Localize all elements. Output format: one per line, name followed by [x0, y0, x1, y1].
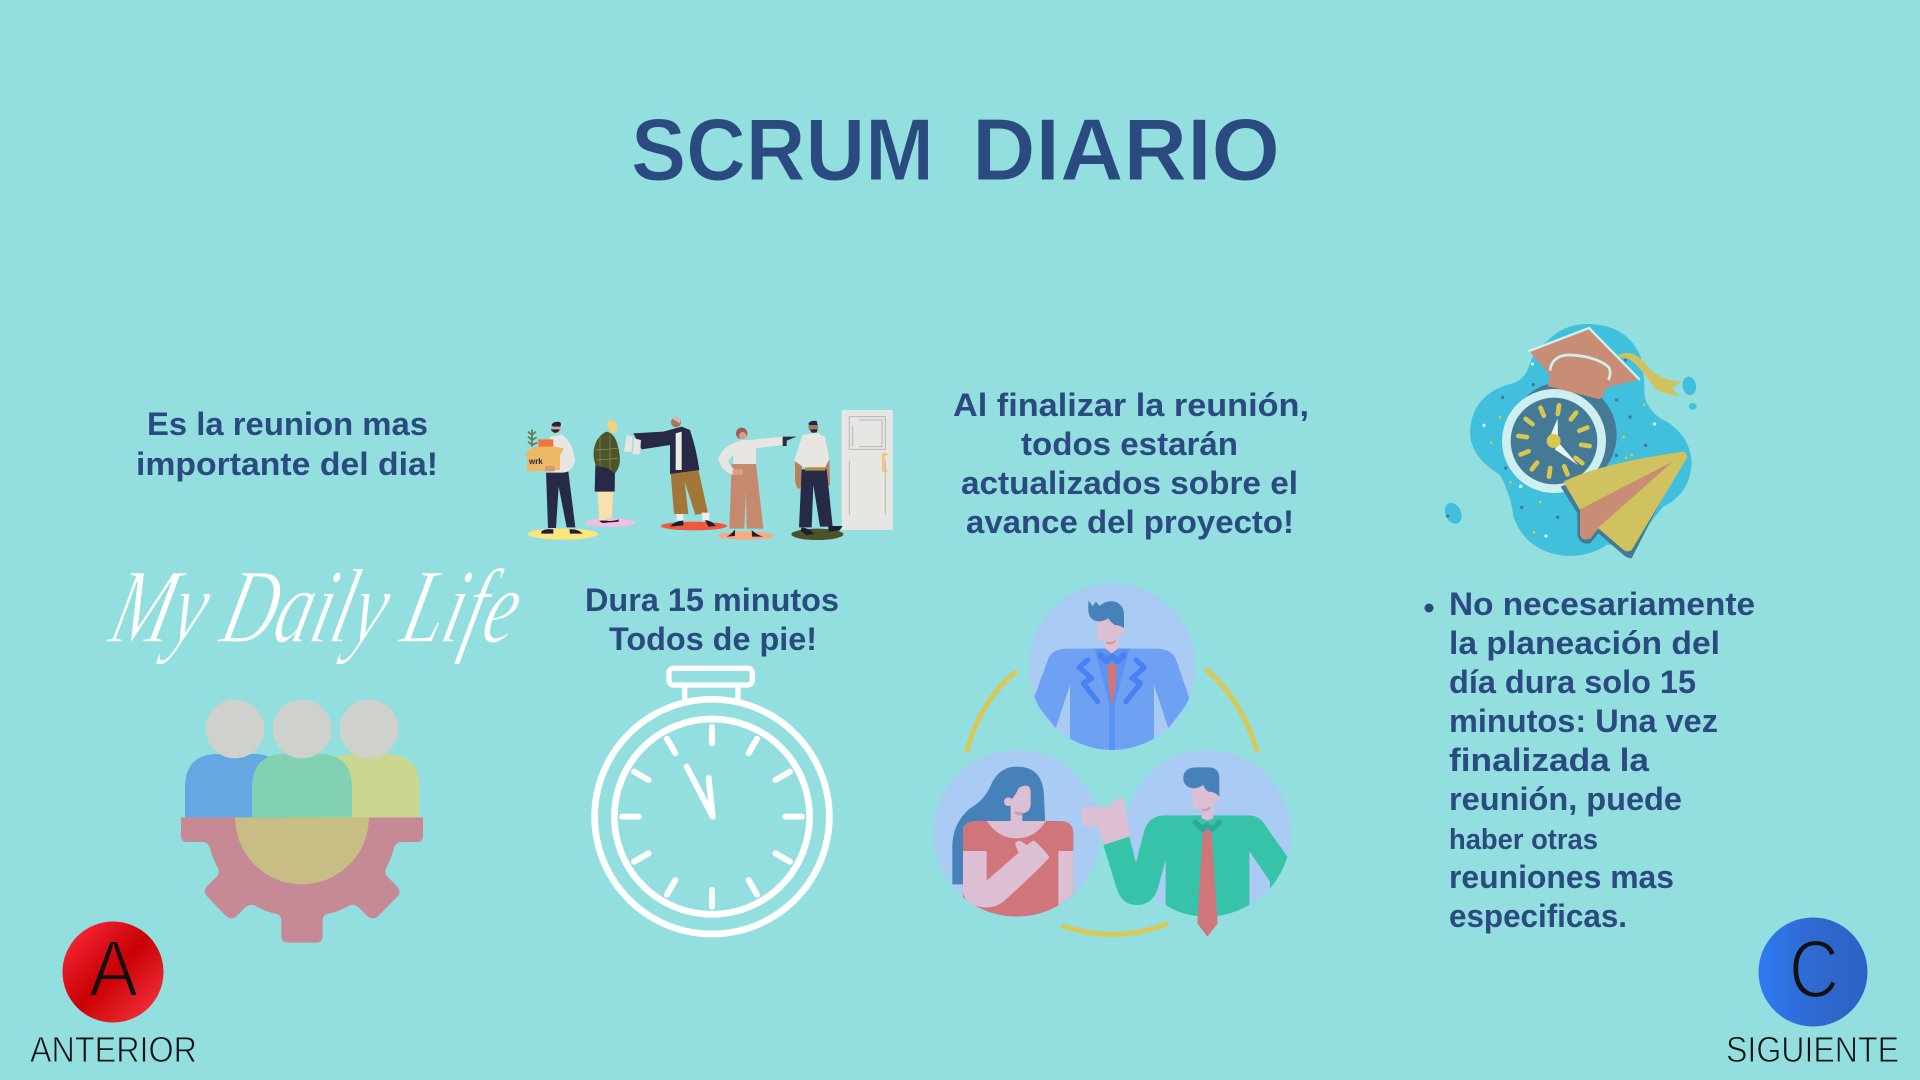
text block: at the end everyone is updated: actualizados sobre el [961, 465, 1298, 501]
woman in green sweater [594, 421, 620, 523]
circle: man in green shirt [1082, 750, 1291, 937]
button: anterior [30, 922, 197, 1070]
door [842, 410, 893, 530]
text block: at the end everyone is updated [953, 387, 1309, 540]
text block: lasts 15 minutes: Todos de pie! [609, 621, 817, 657]
title: DIARIO [972, 100, 1280, 199]
bullet lines: reuniones mas [1449, 859, 1674, 895]
icon: stopwatch [595, 668, 829, 934]
blob background [1470, 324, 1692, 556]
text block: most important meeting: Es la reunion mas [147, 406, 428, 442]
red circle [62, 922, 164, 1022]
letter A: A [89, 924, 139, 1013]
label anterior: ANTERIOR [30, 1029, 197, 1070]
bullet lines: la planeación del [1449, 625, 1720, 661]
button: siguiente [1726, 918, 1899, 1070]
person with box [525, 422, 583, 534]
label siguiente: SIGUIENTE [1726, 1029, 1899, 1070]
paint drops [1442, 376, 1698, 527]
alarm clock [1502, 382, 1617, 493]
circle: man in blue suit [1029, 583, 1195, 750]
person heads [206, 700, 398, 758]
bullet lines: finalizada la [1449, 742, 1649, 778]
text block: most important meeting [136, 406, 438, 482]
bullet lines: haber otras [1449, 824, 1598, 856]
person bodies [185, 754, 419, 817]
person with box: wrk [528, 457, 543, 466]
gear [181, 817, 423, 943]
text block: most important meeting: importante del dia! [136, 446, 438, 482]
text block: lasts 15 minutes [585, 582, 839, 657]
circle: woman in red shirt [933, 750, 1100, 918]
bullet lines: día dura solo 15 [1449, 664, 1696, 700]
text block: at the end everyone is updated: Al finalizar la reunión, [953, 387, 1309, 423]
paper plane [1561, 452, 1687, 558]
connecting arcs [967, 670, 1257, 934]
title [631, 100, 1280, 199]
man by the door [794, 421, 843, 535]
confetti dots [1446, 358, 1656, 538]
older man with papers [624, 416, 716, 527]
bullet lines [1449, 586, 1755, 934]
icon: clock, graduation cap and paper plane [1442, 324, 1698, 558]
bullet lines: especificas. [1449, 898, 1627, 934]
icon: team of three people [933, 583, 1291, 937]
blue circle [1758, 918, 1868, 1026]
text block: lasts 15 minutes: Dura 15 minutos [585, 582, 839, 618]
gear centre [235, 817, 369, 884]
illustration: people in a line at a door [525, 410, 893, 540]
bullet lines: No necesariamente [1449, 586, 1755, 622]
text block: at the end everyone is updated: todos estarán [1021, 426, 1238, 462]
title: SCRUM [631, 100, 934, 199]
bullet lines: reunión, puede [1449, 781, 1682, 817]
icon: team on a gear [181, 700, 423, 943]
script heading: My Daily Life: My Daily Life [99, 548, 534, 666]
graduation cap [1529, 328, 1639, 399]
bullet text block [1424, 586, 1755, 934]
woman pointing [718, 428, 797, 537]
text block: at the end everyone is updated: avance del proyecto! [966, 504, 1294, 540]
floor spots [527, 518, 843, 540]
bullet mark [1424, 604, 1434, 612]
letter C: C [1789, 924, 1839, 1015]
tassel [1618, 353, 1682, 396]
bullet lines: minutos: Una vez [1449, 703, 1718, 739]
